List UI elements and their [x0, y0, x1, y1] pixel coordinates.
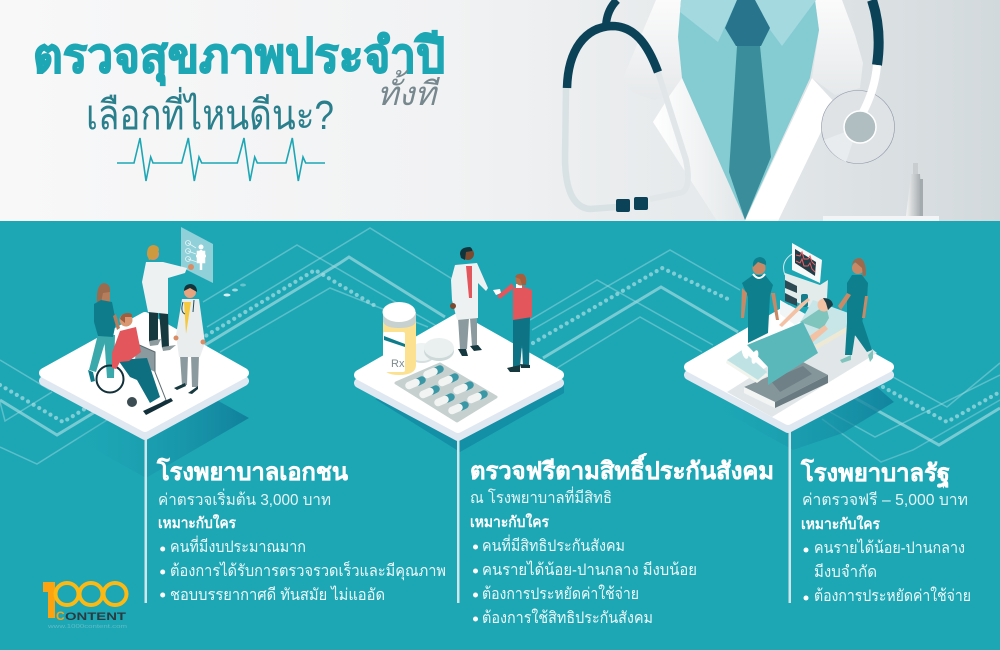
floor area	[727, 322, 877, 417]
icon: heartbeat line	[117, 138, 325, 181]
title	[33, 30, 445, 138]
pill bottle	[382, 302, 416, 375]
panel: social security platform	[359, 247, 564, 603]
logo: 1000 content: C	[56, 609, 65, 623]
logo: 1000 content: www.1000content.com	[48, 624, 127, 630]
pill bottle: Rx	[391, 358, 405, 370]
panel: government hospital platform	[689, 243, 894, 603]
logo: 1000 content: ONTENT	[65, 611, 126, 623]
header background	[0, 0, 1000, 221]
large pills	[409, 338, 454, 363]
bullet list: ต้องการประหยัดค่าใช้จ่าย	[482, 584, 639, 603]
bullet list: ต้องการประหยัดค่าใช้จ่าย	[814, 586, 971, 605]
patient on bed	[726, 298, 862, 385]
logo: 1000 content	[43, 582, 127, 630]
blister pack	[396, 364, 496, 421]
icon: stethoscope	[565, 0, 894, 212]
platform surface	[689, 310, 889, 428]
nurse left	[741, 257, 779, 343]
title line 2: เลือกที่ไหนดีนะ?	[86, 87, 334, 138]
nurse right	[838, 258, 873, 363]
bullet list: ต้องการได้รับการตรวจรวดเร็วและมีคุณภาพ	[170, 560, 446, 581]
bullet list	[473, 534, 697, 627]
teal body background	[0, 221, 1000, 650]
connector line	[144, 436, 147, 603]
decorative ellipses	[224, 284, 246, 296]
connector line	[457, 436, 460, 603]
panel: private hospital platform	[44, 227, 249, 603]
doctor giving paper	[450, 247, 501, 356]
heading: โรงพยาบาลเอกชน	[156, 457, 349, 486]
doctor coat illustration	[623, 0, 863, 221]
doctor at screen	[142, 245, 194, 351]
platform surface	[44, 317, 244, 435]
icon: pen	[823, 163, 939, 221]
heading: โรงพยาบาลรัฐ	[800, 458, 950, 489]
price: ค่าตรวจเริ่มต้น 3,000 บาท	[158, 488, 331, 509]
medical monitor	[780, 243, 828, 325]
location: ณ โรงพยาบาลที่มีสิทธิ	[470, 486, 612, 507]
subheading: เหมาะกับใคร	[801, 515, 881, 533]
hologram screen	[181, 227, 213, 283]
text block: private hospital	[156, 457, 446, 604]
price: ค่าตรวจฟรี – 5,000 บาท	[802, 491, 968, 509]
patient in red	[497, 274, 532, 372]
bullet list: คนที่มีงบประมาณมาก	[170, 535, 306, 556]
title line 1: ตรวจสุขภาพประจำปี	[33, 30, 445, 86]
bullet list: คนรายได้น้อย-ปานกลาง	[814, 538, 965, 557]
title accent: ทั้งที	[377, 70, 440, 112]
platform shadow	[375, 385, 564, 452]
bullet list: มีงบจำกัด	[814, 563, 877, 581]
background circuit lines	[0, 228, 1000, 464]
platform surface	[359, 318, 559, 436]
wheelchair patient	[96, 313, 173, 415]
text block: government hospital	[800, 458, 971, 605]
doctor with stethoscope	[174, 284, 206, 394]
bullet list: ชอบบรรยากาศดี ทันสมัย ไม่แออัด	[170, 585, 385, 604]
subheading: เหมาะกับใคร	[158, 514, 237, 532]
bullet list: ต้องการใช้สิทธิประกันสังคม	[482, 608, 653, 627]
text block: social security	[470, 453, 774, 627]
heading: ตรวจฟรีตามสิทธิ์ประกันสังคม	[470, 453, 774, 485]
nurse pushing wheelchair	[88, 283, 120, 382]
bed base	[744, 362, 828, 408]
bullet list	[160, 535, 446, 604]
bullet list	[804, 538, 971, 605]
platform shadow	[690, 370, 894, 450]
platform shadow	[60, 398, 249, 478]
connector line	[788, 428, 791, 603]
subheading: เหมาะกับใคร	[470, 513, 550, 531]
bullet list: คนรายได้น้อย-ปานกลาง มีงบน้อย	[482, 560, 697, 579]
bullet list: คนที่มีสิทธิประกันสังคม	[482, 534, 625, 555]
